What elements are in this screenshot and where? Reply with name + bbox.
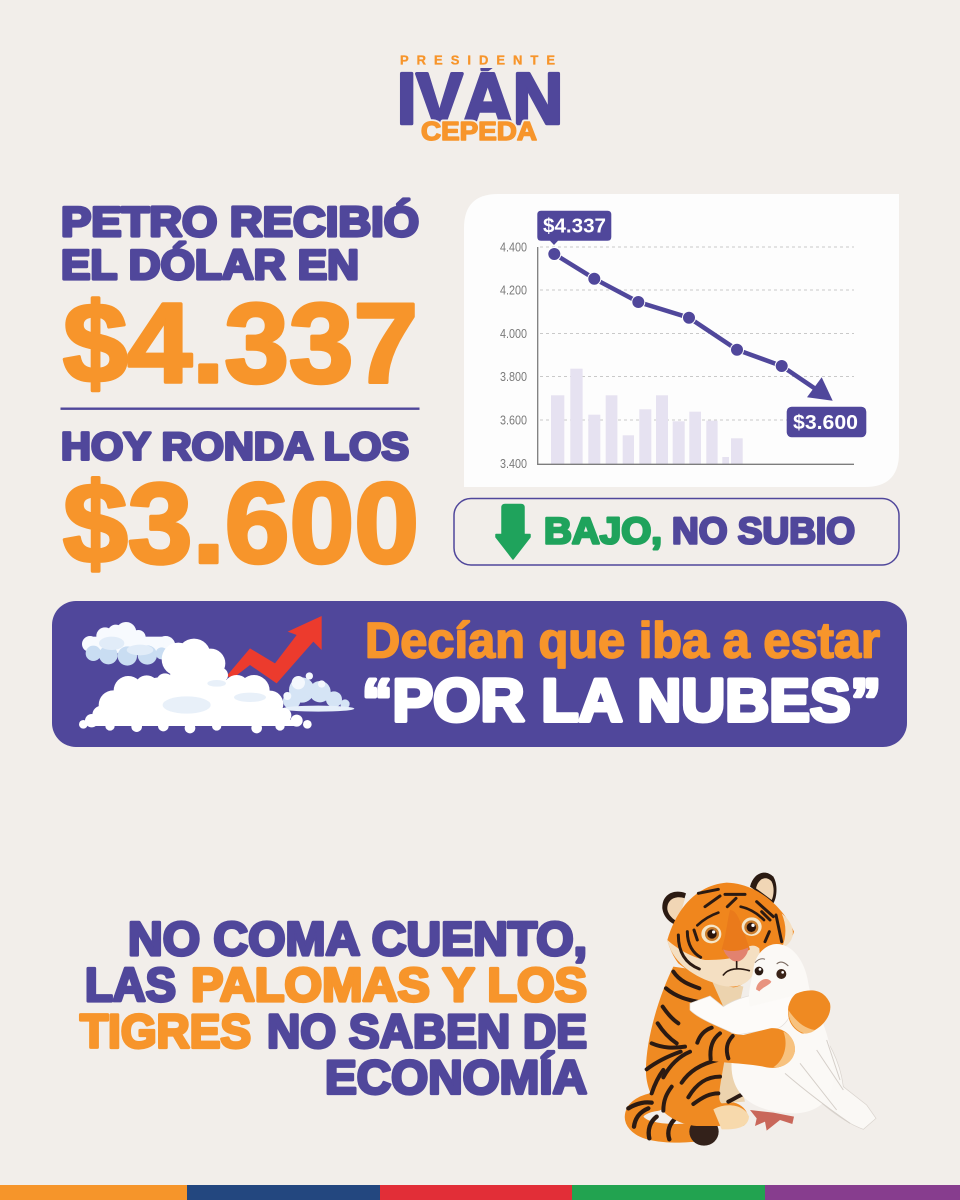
callout box: bajó, no subió: BAJO, xyxy=(544,510,662,552)
tiger body xyxy=(646,967,748,1126)
tiger tail xyxy=(628,1102,719,1146)
callout: $3.600: $3.600 xyxy=(793,412,858,434)
chart y axis labels: 4.000 xyxy=(500,327,527,341)
closing message: TIGRES xyxy=(80,1005,251,1058)
chart gridlines xyxy=(540,247,854,420)
main white cloud xyxy=(79,639,312,733)
cloud shading xyxy=(163,680,266,714)
big number: $4.337: $4.337 xyxy=(63,280,418,406)
tiger nose bridge xyxy=(722,910,750,954)
tiger front paw tips xyxy=(773,1032,795,1067)
tiger ears xyxy=(662,873,776,925)
divider line xyxy=(60,408,420,410)
back right cloud xyxy=(282,672,354,712)
arm stripes xyxy=(697,1028,733,1059)
tiger head xyxy=(667,883,794,987)
tiger head stripes xyxy=(678,889,782,969)
closing message: PALOMAS Y LOS xyxy=(191,958,587,1011)
logo: Presidente Iván Cepeda: CEPEDA xyxy=(421,116,537,146)
chart background bars xyxy=(551,369,743,464)
heading: Hoy ronda los: HOY RONDA LOS xyxy=(61,426,409,468)
closing message: LAS xyxy=(85,958,176,1011)
panel: line chart of the dollar xyxy=(464,194,899,487)
banner text: por la nubes: “POR LA NUBES” xyxy=(362,667,881,734)
chart line with points and arrow xyxy=(548,248,833,401)
chart y axis labels: 4.400 xyxy=(500,240,527,254)
chart background xyxy=(464,194,899,487)
dove body xyxy=(732,987,834,1113)
back left cloud xyxy=(82,622,175,666)
logo: Presidente Iván Cepeda: IVÁN xyxy=(397,60,563,140)
dove wing feather lines xyxy=(785,1040,850,1123)
logo: Presidente Iván Cepeda: PRESIDENTE xyxy=(400,52,555,68)
right cheek fur xyxy=(782,913,793,948)
dove left wing xyxy=(690,991,795,1035)
tiger foot xyxy=(713,1105,749,1129)
red arrow xyxy=(227,616,322,683)
closing message: NO COMA CUENTO, xyxy=(128,912,587,965)
dove tail feathers xyxy=(787,1030,876,1129)
callout: $4.337 xyxy=(537,211,611,245)
second paw tips xyxy=(788,1010,815,1034)
tiger nose and mouth xyxy=(723,947,749,975)
logo: Presidente Iván Cepeda: CEPEDA xyxy=(421,116,537,146)
dove head xyxy=(749,944,810,1007)
tiger arm xyxy=(687,1028,795,1068)
tiger body stripes xyxy=(647,972,745,1111)
dove face xyxy=(755,959,788,991)
rainbow footer bar xyxy=(0,1185,960,1200)
closing message: NO SABEN DE xyxy=(267,1005,587,1058)
callout box: bajó, no subió: NO SUBIO xyxy=(672,510,855,552)
icon: green down arrow xyxy=(496,504,530,559)
bird feet xyxy=(750,1110,794,1131)
chart y axis labels: 4.200 xyxy=(500,284,527,298)
heading: Petro recibió el dólar: PETRO RECIBIÓ xyxy=(61,197,419,245)
chart y axis labels: 3.800 xyxy=(500,370,527,384)
tiger second paw xyxy=(788,990,830,1033)
callout: $3.600 xyxy=(787,407,866,437)
tiger belly xyxy=(719,1057,745,1103)
banner text: decían que iba a estar: Decían que iba a estar xyxy=(365,612,880,668)
closing message xyxy=(80,912,587,1104)
chart y axis labels xyxy=(500,240,527,471)
tiger eyes and brows xyxy=(697,907,764,943)
illustration: tiger hugging dove xyxy=(628,873,876,1146)
icon: clouds with red arrow xyxy=(79,616,354,733)
chart axes xyxy=(538,247,854,464)
chart y axis labels: 3.400 xyxy=(500,457,527,471)
tiger cheeks xyxy=(667,940,760,987)
callout box: bajó, no subió xyxy=(454,498,899,565)
callout: $4.337: $4.337 xyxy=(543,216,606,238)
closing message: ECONOMÍA xyxy=(325,1050,587,1104)
tiger chest xyxy=(710,977,743,1010)
heading: Petro recibió el dólar: EL DÓLAR EN xyxy=(61,240,359,288)
heading: Petro recibió el dólar xyxy=(61,197,419,288)
chart y axis labels: 3.600 xyxy=(500,414,527,428)
big number: $3.600: $3.600 xyxy=(63,460,419,588)
banner: por las nubes xyxy=(52,601,907,747)
